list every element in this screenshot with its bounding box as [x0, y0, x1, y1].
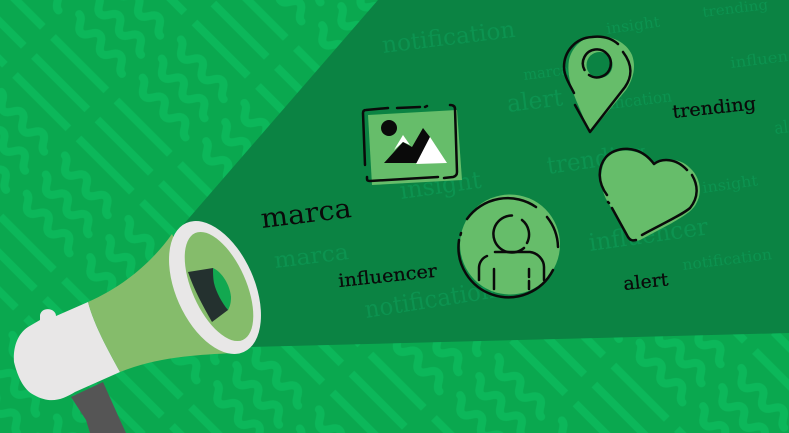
panel: megaphone sound beam: [170, 0, 789, 347]
background word cloud: insight: [605, 13, 661, 38]
megaphone pole: [71, 382, 120, 420]
label: trending: trending: [671, 93, 757, 123]
icon: heart: [600, 149, 700, 241]
background word cloud: notification: [681, 245, 773, 274]
icon: picture frame: [363, 105, 462, 185]
background word cloud: trending: [545, 138, 648, 180]
megaphone handle body: [14, 302, 120, 400]
background word cloud: insight: [701, 171, 759, 197]
background word cloud: marca: [273, 240, 350, 274]
background word cloud: [273, 0, 789, 324]
megaphone opening: [213, 268, 231, 310]
megaphone pole lower: [86, 420, 126, 433]
background word cloud: alert: [505, 83, 565, 118]
icon: map pin: [564, 36, 634, 133]
megaphone: [14, 207, 280, 433]
megaphone inner: [171, 222, 267, 351]
megaphone cone: [88, 234, 232, 372]
icon: person: [458, 194, 560, 297]
label: marca: marca: [259, 193, 353, 235]
background word cloud: influencer: [587, 212, 710, 257]
label: influencer: influencer: [337, 261, 438, 292]
background word cloud: insight: [398, 166, 483, 205]
background word cloud: notification: [583, 86, 673, 116]
background word cloud: notification: [363, 276, 497, 324]
megaphone throat: [188, 268, 231, 322]
megaphone rim: [150, 207, 280, 368]
background word cloud: notification: [381, 17, 517, 59]
background word cloud: marca: [522, 60, 570, 84]
background word cloud: influen: [729, 47, 789, 72]
label: alert: alert: [622, 269, 670, 295]
